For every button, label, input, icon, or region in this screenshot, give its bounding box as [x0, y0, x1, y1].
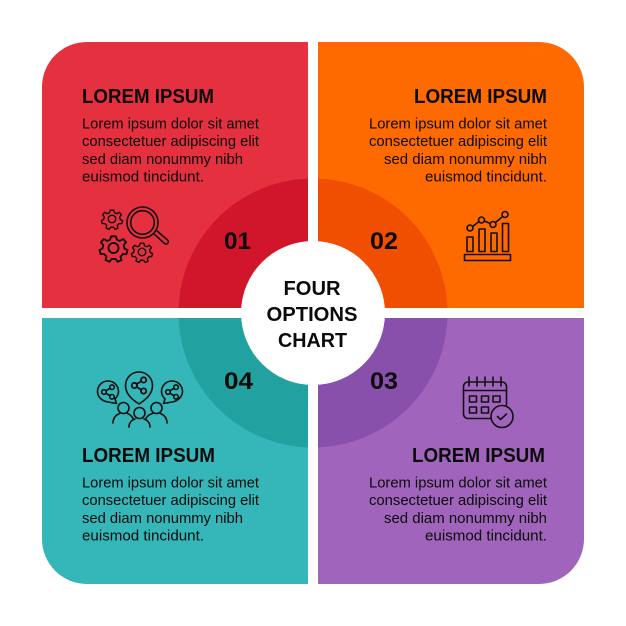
number 04: 04 [224, 368, 254, 395]
number 03: 03 [370, 368, 398, 395]
quarter ring: option 02 [318, 178, 448, 308]
center title: FOUR [284, 277, 341, 300]
heading: option 03: LOREM IPSUM [412, 445, 545, 467]
text block: option 01: euismod tincidunt. [82, 169, 204, 185]
text block: option 01: consectetuer adipiscing elit [82, 134, 260, 150]
panel: option 01 (red) [42, 42, 308, 308]
heading: option 02: LOREM IPSUM [414, 86, 547, 108]
center circle [241, 241, 385, 385]
text block: option 01: Lorem ipsum dolor sit amet [82, 116, 260, 132]
text block: option 04: euismod tincidunt. [82, 528, 204, 544]
text block: option 04: Lorem ipsum dolor sit amet [82, 476, 260, 492]
panel: option 03 (purple) [318, 318, 584, 584]
icon: calendar with check [464, 377, 513, 428]
text block: option 03: euismod tincidunt. [425, 528, 547, 544]
center title [266, 277, 358, 352]
quarter ring: option 01 [178, 178, 308, 308]
text block: option 04 [82, 476, 260, 544]
text block: option 02: Lorem ipsum dolor sit amet [369, 116, 548, 132]
text block: option 04: consectetuer adipiscing elit [82, 493, 260, 509]
panel: option 02 (orange) [318, 42, 584, 308]
text block: option 02 [369, 116, 548, 185]
text block: option 03 [369, 476, 548, 544]
text block: option 02: consectetuer adipiscing elit [369, 134, 548, 150]
center title: OPTIONS [266, 303, 358, 326]
heading: option 01: LOREM IPSUM [82, 86, 214, 108]
text block: option 02: euismod tincidunt. [425, 169, 547, 185]
text block: option 03: sed diam nonummy nibh [384, 511, 547, 527]
text block: option 03: consectetuer adipiscing elit [369, 493, 548, 509]
icon: growth bar chart [464, 212, 510, 260]
text block: option 03: Lorem ipsum dolor sit amet [369, 476, 548, 492]
panel: option 04 (teal) [42, 318, 308, 584]
icon: gears and magnifier [99, 207, 168, 262]
number 01: 01 [224, 228, 251, 255]
icon: team sharing ideas [98, 372, 182, 427]
text block: option 02: sed diam nonummy nibh [384, 152, 547, 168]
number 02: 02 [370, 228, 398, 255]
text block: option 01: sed diam nonummy nibh [82, 152, 243, 168]
text block: option 04: sed diam nonummy nibh [82, 511, 243, 527]
center title: CHART [278, 329, 347, 352]
quarter ring: option 04 [178, 318, 308, 448]
quarter ring: option 03 [318, 318, 448, 448]
text block: option 01 [82, 116, 260, 185]
heading: option 04: LOREM IPSUM [82, 445, 215, 467]
